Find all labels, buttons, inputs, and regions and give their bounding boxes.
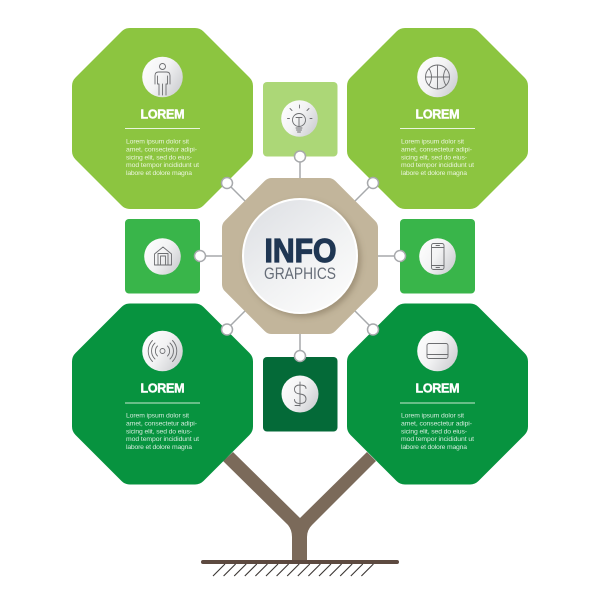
heading: LOREM [140, 108, 184, 122]
text block: sicing elit, sed do eius- [126, 154, 192, 161]
heading: LOREM [416, 108, 460, 122]
heading: LOREM [140, 382, 184, 396]
panel: left square with house [125, 219, 200, 294]
text block: sicing elit, sed do eius- [126, 428, 192, 435]
connector nodes [194, 151, 406, 362]
heading: LOREM [416, 382, 460, 396]
text block: mod tempor incididunt ut [401, 162, 474, 169]
icon: house [144, 238, 181, 275]
central circle with title [243, 199, 357, 313]
panel: bottom right octagon [359, 316, 516, 472]
icon: basketball [417, 57, 458, 97]
text block: amet, consectetur adipi- [401, 420, 472, 428]
text block: labore et dolore magna [126, 170, 192, 177]
icon: phone [419, 238, 456, 275]
icon: signal [142, 331, 183, 371]
tree trunk and branches [223, 452, 376, 561]
text block: sicing elit, sed do eius- [401, 428, 467, 435]
panel: top right octagon [359, 40, 516, 197]
text block: Lorem ipsum dolor sit [401, 412, 464, 420]
text block [126, 138, 199, 177]
icon: light bulb [281, 100, 318, 137]
title: INFO: INFO [264, 232, 336, 269]
text block: Lorem ipsum dolor sit [126, 412, 189, 420]
text block: Lorem ipsum dolor sit [401, 138, 464, 146]
text block [401, 412, 474, 451]
text block: mod tempor incididunt ut [126, 162, 199, 169]
text block: labore et dolore magna [401, 170, 467, 177]
panel: top left octagon [84, 40, 241, 197]
icon: person [142, 57, 183, 97]
panel: bottom left octagon [84, 316, 241, 472]
text block: mod tempor incididunt ut [126, 436, 199, 443]
text block: sicing elit, sed do eius- [401, 154, 467, 161]
text block: amet, consectetur adipi- [401, 146, 472, 154]
text block [126, 412, 199, 451]
subtitle: GRAPHICS: GRAPHICS [264, 265, 336, 283]
icon: tablet [417, 331, 458, 371]
ground with hatching [201, 560, 399, 576]
connector lines [200, 156, 400, 356]
panel: top square with bulb [263, 82, 338, 156]
text block: amet, consectetur adipi- [126, 420, 197, 428]
text block: Lorem ipsum dolor sit [126, 138, 189, 146]
text block: labore et dolore magna [401, 444, 467, 451]
panel: bottom square with dollar [263, 357, 338, 432]
central octagon [232, 188, 368, 324]
text block: labore et dolore magna [126, 444, 192, 451]
text block: mod tempor incididunt ut [401, 436, 474, 443]
icon: dollar [282, 376, 318, 412]
text block [401, 138, 474, 177]
panel: right square with phone [400, 219, 475, 294]
text block: amet, consectetur adipi- [126, 146, 197, 154]
